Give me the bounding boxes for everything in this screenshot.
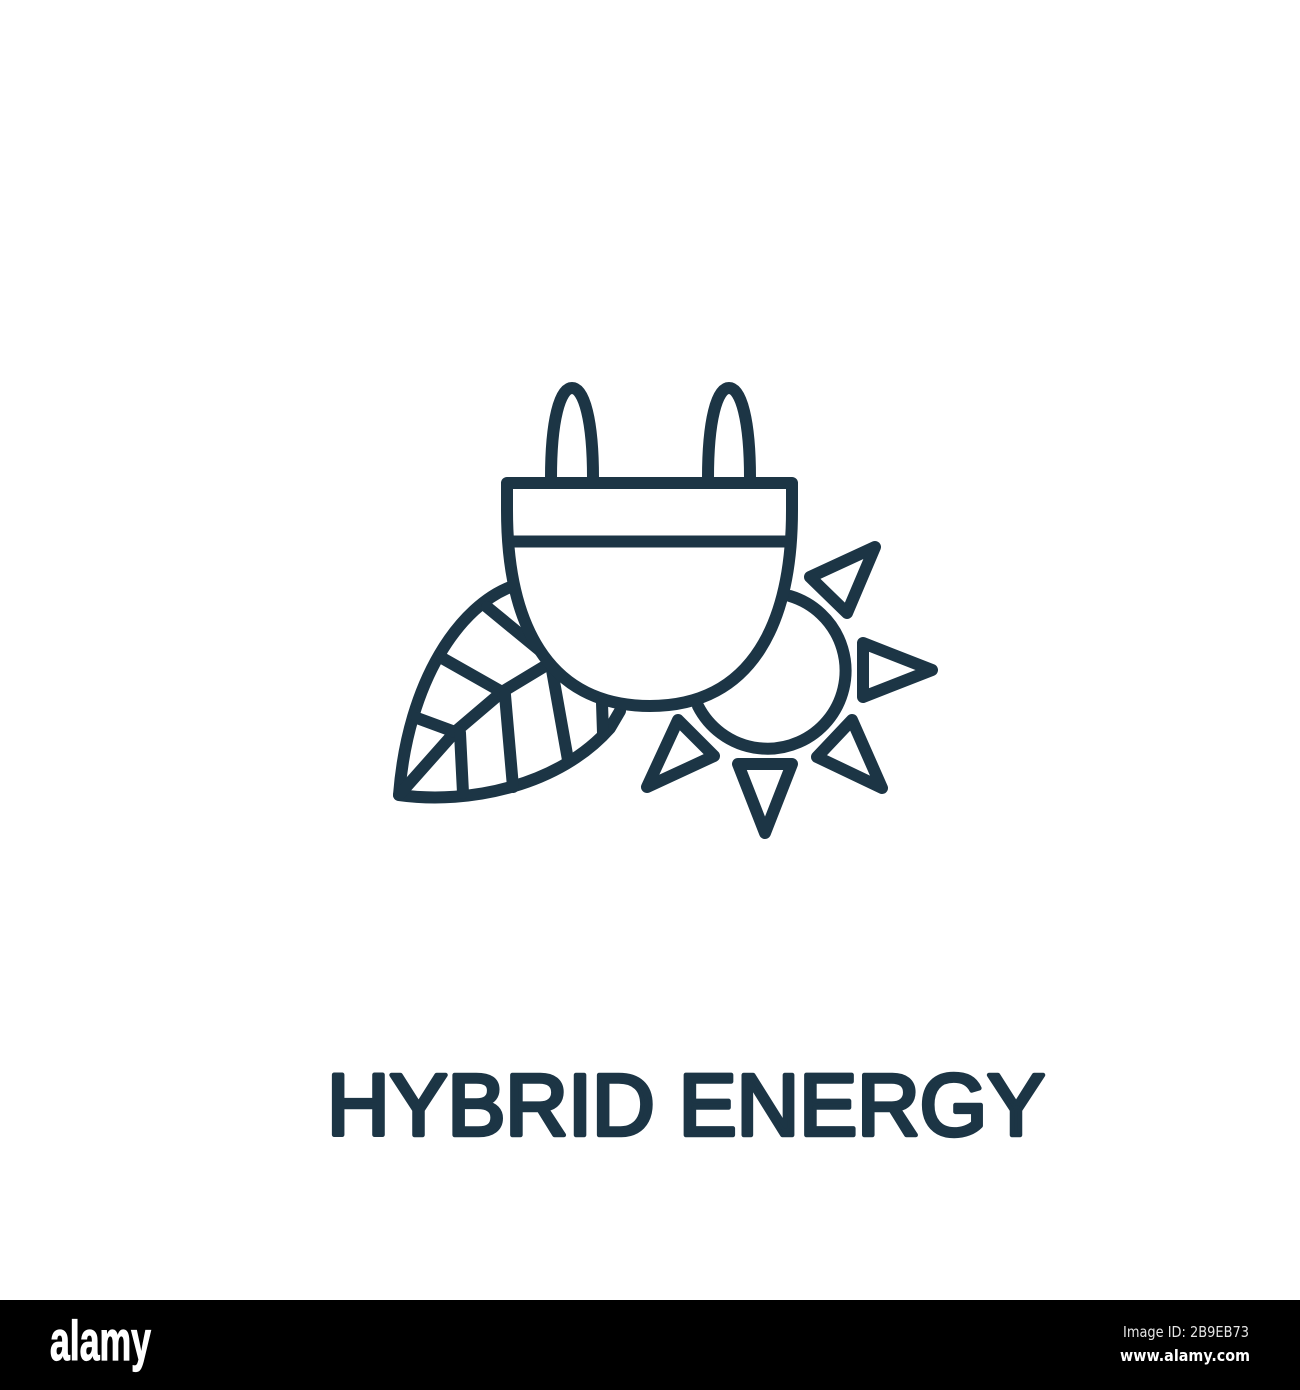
icon: plug divider band	[509, 536, 790, 548]
icon: sun rays	[647, 547, 932, 833]
icon: hybrid energy plug, leaf and sun	[399, 388, 932, 833]
website url: www.alamy.com	[1120, 1346, 1250, 1365]
title: HYBRID ENERGY	[327, 1057, 1045, 1154]
icon: plug body	[507, 483, 792, 706]
icon: sun disc	[698, 596, 846, 749]
footer bar	[0, 1300, 1300, 1390]
footer logo: alamy	[50, 1309, 151, 1372]
icon: plug prongs	[551, 388, 750, 478]
icon: leaf	[399, 586, 620, 797]
image id: Image ID: 2B9EB73	[1123, 1323, 1249, 1341]
